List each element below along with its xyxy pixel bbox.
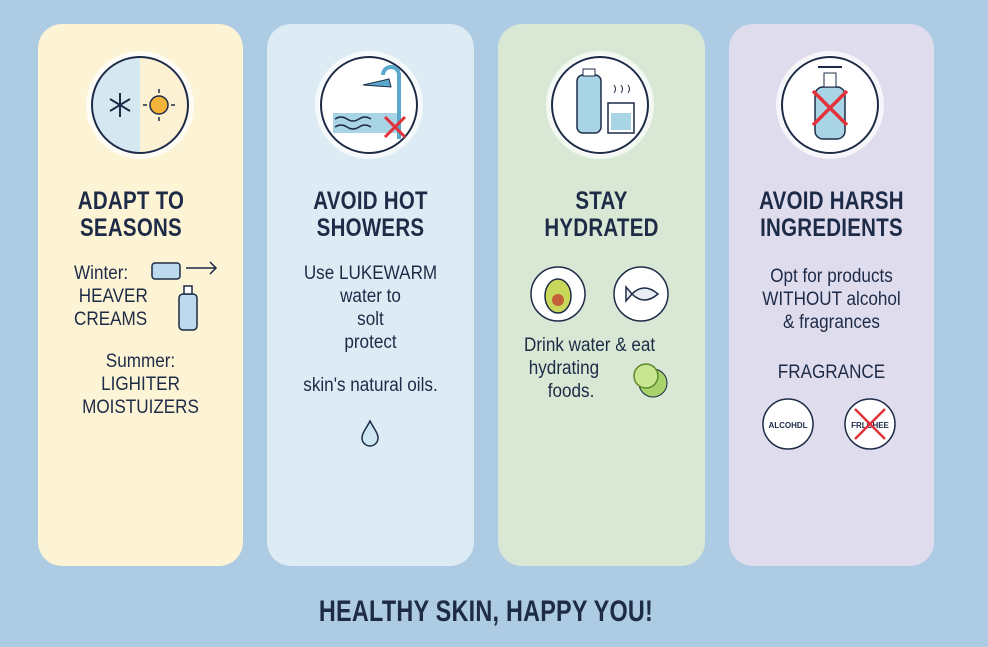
footer tagline: HEALTHY SKIN, HAPPY YOU!	[319, 595, 653, 628]
text body: hydrating	[529, 358, 599, 379]
text: winter	[74, 263, 148, 330]
text body: & fragrances	[783, 312, 880, 333]
title: AVOID HARSH	[759, 187, 904, 215]
icon: shower	[319, 55, 419, 155]
title: HYDRATED	[544, 214, 659, 242]
text: winter: CREAMS	[74, 309, 147, 330]
text: winter: Winter:	[74, 263, 128, 284]
icon: jar and bottle	[151, 262, 217, 331]
text body	[762, 266, 901, 333]
text body: Use LUKEWARM	[304, 263, 437, 284]
text body: Opt for products	[770, 266, 893, 287]
title	[759, 187, 904, 242]
text: oils: skin's natural oils.	[303, 375, 438, 396]
icon: alcohol badge: ALCOHDL	[768, 421, 808, 430]
icon: alcohol badge	[762, 398, 814, 450]
text body: protect	[344, 332, 397, 353]
icon: avocado	[530, 266, 586, 322]
title	[78, 187, 184, 242]
panel: avoid harsh ingredients	[729, 24, 934, 566]
title: INGREDIENTS	[760, 214, 903, 242]
title	[544, 187, 659, 242]
icon: snowflake and sun	[90, 55, 190, 155]
icon: fragrance free crossed	[844, 398, 896, 450]
text body: Drink water & eat	[524, 335, 655, 356]
panel: adapt to seasons	[38, 24, 243, 566]
title: SHOWERS	[317, 214, 424, 242]
icon: cucumber	[633, 363, 668, 398]
text body	[304, 263, 437, 353]
panel: avoid hot showers	[267, 24, 474, 566]
title: SEASONS	[80, 214, 182, 242]
text body: WITHOUT alcohol	[762, 289, 901, 310]
title: STAY	[575, 187, 628, 215]
icon: fish	[613, 266, 669, 322]
title: ADAPT TO	[78, 187, 184, 215]
text: summer: Summer:	[106, 351, 175, 372]
text: summer	[82, 351, 199, 418]
icon: fragrance free crossed: FRLCHEE	[851, 421, 890, 430]
text body	[524, 335, 655, 402]
panel: stay hydrated	[498, 24, 705, 566]
text body: solt	[357, 309, 384, 330]
label: fragrance: FRAGRANCE	[778, 362, 885, 383]
title: AVOID HOT	[313, 187, 428, 215]
icon: crossed bottle	[780, 55, 880, 155]
text: winter: HEAVER	[79, 286, 148, 307]
title	[313, 187, 428, 242]
text body: water to	[340, 286, 401, 307]
text: summer: LIGHITER	[101, 374, 180, 395]
icon: drop	[361, 420, 379, 447]
text body: foods.	[548, 381, 594, 402]
text: summer: MOISTUIZERS	[82, 397, 199, 418]
icon: bottle and glass	[550, 55, 650, 155]
